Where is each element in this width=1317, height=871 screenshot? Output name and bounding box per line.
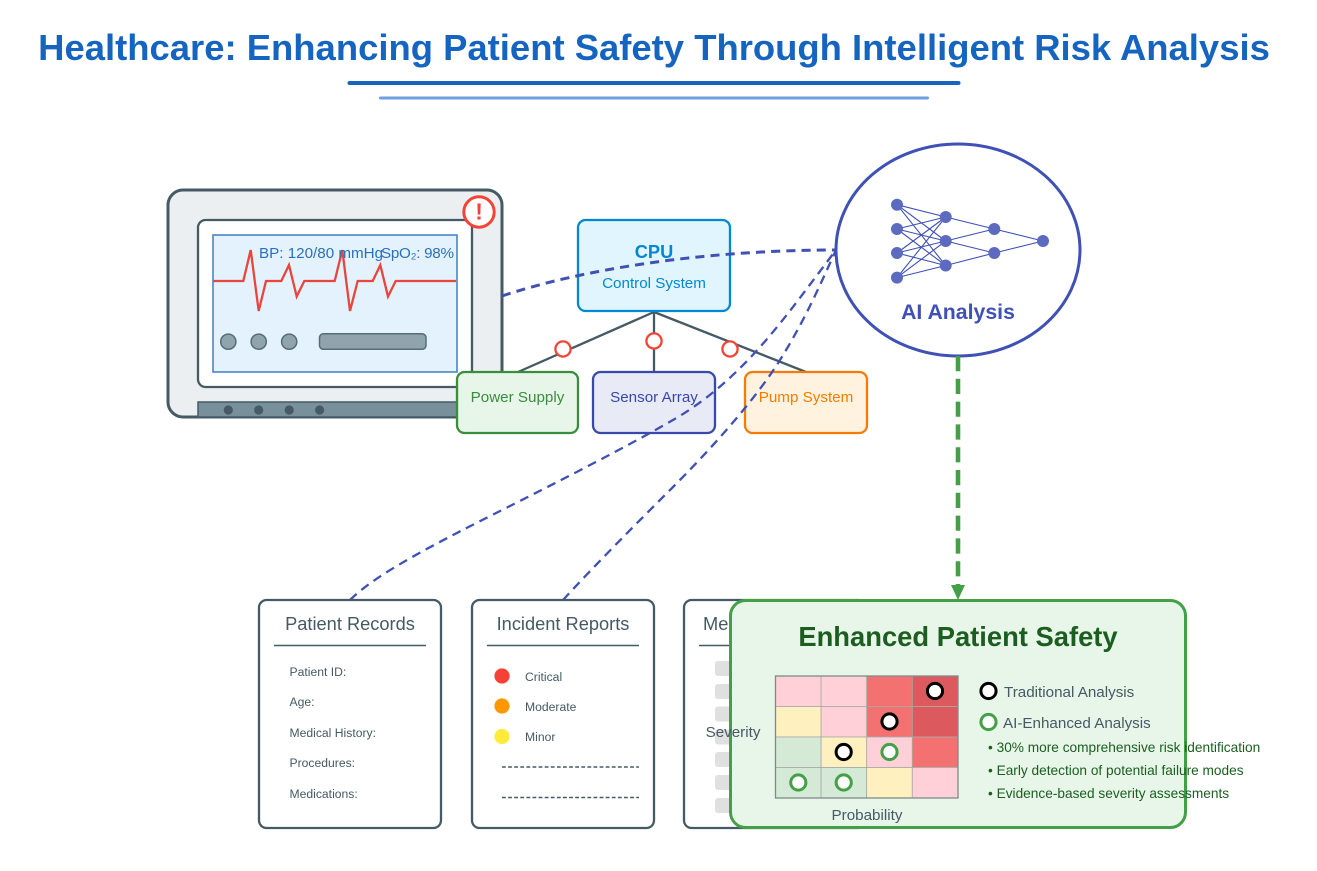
benefits list: • Evidence-based severity assessments: [988, 786, 1229, 801]
title: Healthcare: Enhancing Patient Safety Through Intelligent Risk Analysis: [38, 27, 1270, 68]
legend: [981, 683, 1151, 732]
panel: incident reports: Minor: [525, 730, 555, 744]
panel: incident reports: Incident Reports: [497, 613, 629, 634]
probability axis label: Probability: [832, 807, 903, 824]
dashed arrow: incident reports to AI: [563, 250, 836, 600]
medical monitor: SpO₂: 98%: [381, 245, 454, 262]
risk matrix: [776, 676, 958, 798]
sensor array box: [593, 372, 715, 433]
panel: patient records: Patient ID:: [290, 665, 346, 679]
panel: third document card: Medical Literature: [703, 613, 848, 634]
benefits list: • Early detection of potential failure modes: [988, 763, 1244, 778]
power supply box: Power Supply: [471, 389, 565, 406]
pump system box: [745, 372, 867, 433]
severity axis label: Severity: [706, 724, 761, 741]
panel: patient records: Procedures:: [290, 756, 355, 770]
sensor array box: Sensor Array: [610, 389, 698, 406]
benefits list: [988, 740, 1260, 801]
connector lines with fault nodes: [518, 312, 806, 372]
panel: patient records: Medications:: [290, 787, 358, 801]
dashed arrow: patient records to AI: [350, 250, 836, 600]
panel: patient records: [259, 600, 441, 828]
green arrow: AI to patient safety: [951, 356, 965, 600]
panel: enhanced patient safety: [706, 600, 1260, 828]
icon: alert badge: [464, 197, 494, 227]
panel: patient records: Medical History:: [290, 726, 376, 740]
AI analysis circle: AI Analysis: [901, 300, 1015, 324]
legend: AI-Enhanced Analysis: [1003, 715, 1151, 732]
panel: patient records: Patient Records: [285, 613, 415, 634]
icon: alert badge: !: [475, 198, 483, 224]
panel: incident reports: Moderate: [525, 700, 577, 714]
panel: incident reports: Critical: [525, 670, 562, 684]
panel: patient records: Age:: [290, 695, 315, 709]
legend: Traditional Analysis: [1004, 684, 1135, 701]
AI analysis circle: [836, 144, 1080, 356]
benefits list: • 30% more comprehensive risk identification: [988, 740, 1260, 755]
medical monitor: BP: 120/80 mmHg: [259, 245, 383, 262]
power supply box: [457, 372, 578, 433]
pump system box: Pump System: [759, 389, 853, 406]
dashed arrow: monitor to AI: [502, 250, 836, 296]
CPU control system box: Control System: [602, 275, 706, 292]
panel: enhanced patient safety: Enhanced Patient Safety: [798, 621, 1118, 652]
panel: third document card: [684, 600, 866, 828]
CPU control system box: CPU: [635, 241, 673, 262]
CPU control system box: [578, 220, 730, 311]
medical monitor: [168, 190, 502, 417]
panel: incident reports: [472, 600, 654, 828]
